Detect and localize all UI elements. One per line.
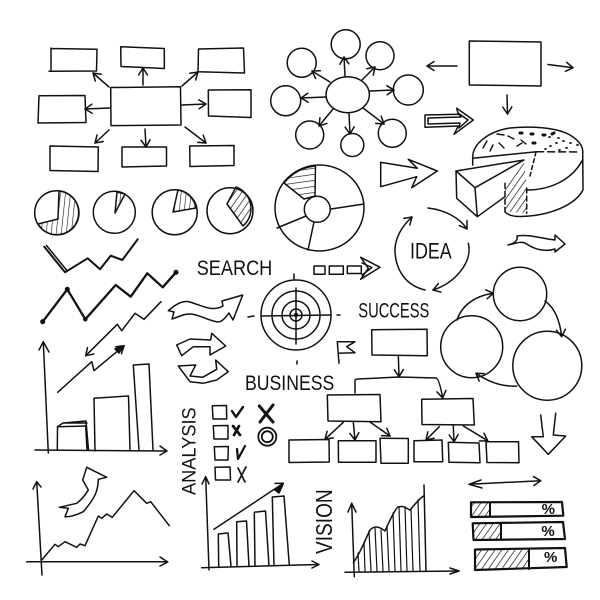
bubble diagram [271, 30, 423, 156]
bar chart with rising arrow [202, 477, 319, 570]
box chain arrow [314, 257, 380, 279]
flag [337, 342, 355, 363]
flow chart [289, 329, 519, 463]
bar chart [35, 342, 167, 455]
area chart [345, 485, 459, 577]
wavy right arrow [508, 235, 565, 252]
text: SEARCH: SEARCH [197, 257, 272, 280]
lightning arrow up [58, 346, 124, 392]
four pie charts [35, 187, 253, 235]
double line arrow [425, 108, 473, 134]
rectangle with three arrows [427, 41, 573, 114]
text: percent one: % [542, 501, 555, 518]
target [248, 274, 340, 364]
line chart with curved arrow [27, 467, 169, 575]
label: IDEA: IDEA [410, 238, 452, 263]
3D pie chart [456, 127, 583, 217]
cycle arrows [177, 333, 228, 383]
circle cycle [441, 267, 582, 400]
percent bars [471, 501, 567, 570]
text: VISION: VISION [311, 489, 337, 554]
text: ANALYSIS: ANALYSIS [180, 407, 201, 495]
wavy up arrow [168, 295, 243, 322]
zigzag line two with dots [41, 270, 178, 324]
lightning arrow down [86, 302, 161, 356]
text: BUSINESS: BUSINESS [245, 372, 334, 395]
large outline arrow [381, 159, 437, 188]
text: SUCCESS: SUCCESS [358, 300, 429, 323]
zigzag line one [44, 239, 138, 272]
checklist [212, 405, 276, 482]
donut chart [275, 165, 364, 251]
idea cycle [395, 208, 469, 290]
down arrow [532, 413, 566, 454]
text: percent three: % [544, 549, 557, 566]
text: percent two: % [541, 523, 555, 540]
horizontal double arrow [469, 480, 541, 488]
mind map of rectangles [38, 47, 251, 172]
